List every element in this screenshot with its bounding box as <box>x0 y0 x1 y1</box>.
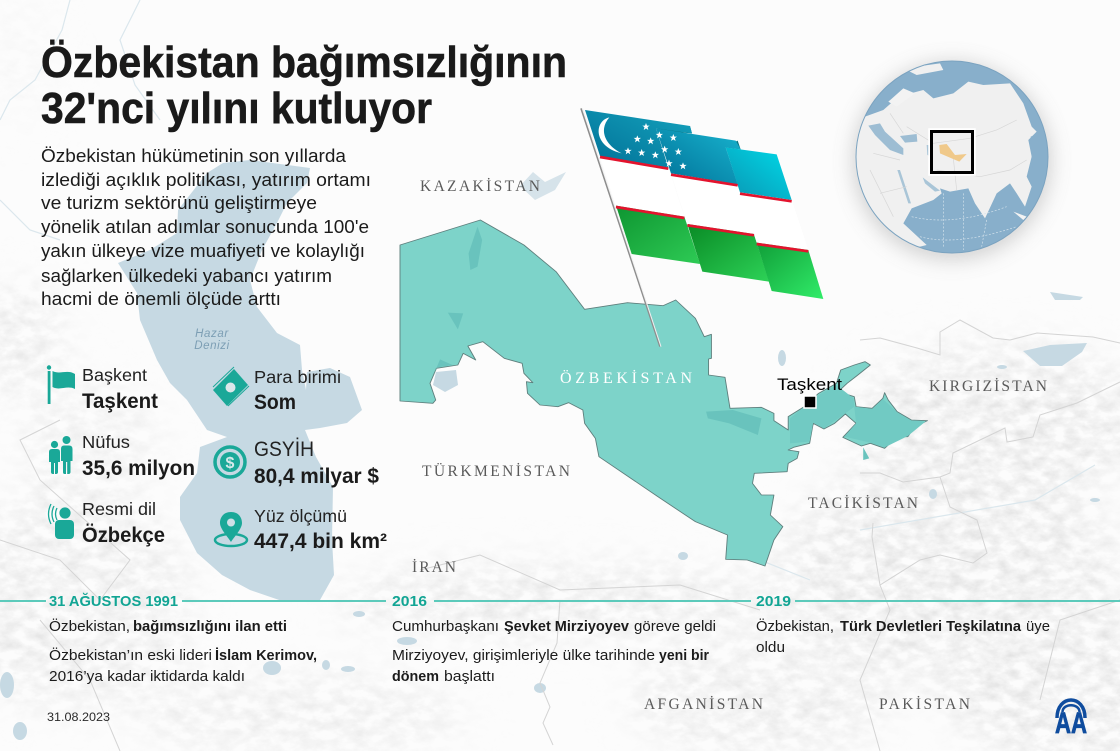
sea label: Hazar Denizi: Denizi <box>194 340 230 352</box>
fact: official language <box>48 499 165 547</box>
timeline entry: 1991 <box>49 592 317 685</box>
darker lakes and eastern valley <box>434 227 869 460</box>
fact: currency <box>213 367 341 414</box>
fact: capital <box>47 365 158 413</box>
icon: speaking person <box>48 504 74 539</box>
intro paragraph: yakın ülkeye vize muafiyeti ve kolaylığı <box>41 240 365 261</box>
fact: official language: Resmi dil <box>82 499 156 519</box>
fact: area: Yüz ölçümü <box>254 506 347 526</box>
intro paragraph: Özbekistan hükümetinin son yıllarda <box>41 145 347 166</box>
fact: GDP <box>215 438 379 488</box>
fact: GDP: GSYİH <box>254 438 314 461</box>
timeline entry: 1991: 2016’ya kadar iktidarda kaldı <box>49 669 245 685</box>
timeline entry: 2016: Cumhurbaşkanı <box>392 619 499 635</box>
intro paragraph: izlediği açıklık politikası, yatırım ortamı <box>41 169 371 190</box>
country label: Özbekistan: ÖZBEKİSTAN <box>560 369 692 387</box>
timeline entry: 2016: Şevket Mirziyoyev <box>504 619 629 635</box>
timeline entry: 2019: oldu <box>756 640 785 656</box>
icon: dollar coin: $ <box>226 455 235 472</box>
timeline <box>0 592 1120 685</box>
country label: Kırgızistan: KIRGIZİSTAN <box>929 378 1047 395</box>
Caspian Sea <box>118 160 362 602</box>
timeline entry: 2019: üye <box>1026 619 1050 635</box>
fact: area: 447,4 bin km² <box>254 530 387 553</box>
timeline entry: 2016: 2016 <box>392 593 427 610</box>
timeline entry: 2016: göreve geldi <box>634 619 716 635</box>
timeline entry: 2016: Mirziyoyev, girişimleriyle ülke tarihinde <box>392 648 655 664</box>
capital marker: Taşkent <box>777 375 842 408</box>
icon: banknote <box>213 367 249 406</box>
title <box>41 38 567 133</box>
icon: flag <box>47 365 75 404</box>
intro paragraph: yönelik atılan adımlar sonucunda 100'e <box>41 216 369 237</box>
flag pole <box>581 108 661 347</box>
timeline entry: 2019: Türk Devletleri Teşkilatına <box>840 619 1022 635</box>
fact: currency: Para birimi <box>254 367 341 387</box>
logo: Anadolu Agency: AA <box>1055 707 1087 740</box>
timeline entry: 1991: İslam Kerimov, <box>215 647 317 664</box>
fact: area <box>215 506 387 553</box>
icon: dollar coin <box>215 447 245 477</box>
timeline entry: 1991: 31 AĞUSTOS 1991 <box>49 592 178 610</box>
icon: location pin <box>215 512 247 546</box>
map of Uzbekistan <box>400 220 927 566</box>
timeline entry: 1991: Özbekistan, <box>49 617 130 635</box>
fact: capital: Taşkent <box>82 390 158 413</box>
fact: capital: Başkent <box>82 365 147 385</box>
timeline entry: 2016 <box>392 593 716 685</box>
timeline line <box>0 600 1120 602</box>
sea label: Hazar Denizi: Hazar <box>195 328 229 340</box>
flag of Uzbekistan <box>581 108 823 347</box>
logo: Anadolu Agency <box>1055 700 1087 740</box>
title: 32'nci yılını kutluyor <box>41 84 432 133</box>
country label: Afganistan: AFGANİSTAN <box>644 696 763 713</box>
intro paragraph: hacmi de önemli ölçüde arttı <box>41 288 281 309</box>
locator globe <box>840 61 1050 259</box>
timeline entry: 1991: bağımsızlığını ilan etti <box>133 619 287 635</box>
fact: population <box>49 432 195 480</box>
timeline entry: 2016: dönem <box>392 669 439 685</box>
country label: Pakistan: PAKİSTAN <box>879 696 970 713</box>
timeline entry: 2019: 2019 <box>756 593 791 610</box>
icon: people <box>49 436 72 474</box>
country label: Kazakistan: KAZAKİSTAN <box>420 178 540 195</box>
timeline entry: 2016: başlattı <box>444 669 495 685</box>
fact: official language: Özbekçe <box>82 524 165 547</box>
country label: İran: İRAN <box>412 559 456 576</box>
timeline entry: 1991: Özbekistan’ın eski lideri <box>49 646 212 664</box>
capital marker: Taşkent: Taşkent <box>777 375 842 394</box>
fact: population: Nüfus <box>82 432 130 452</box>
fact: currency: Som <box>254 391 296 414</box>
fact: GDP: 80,4 milyar $ <box>254 465 379 488</box>
intro paragraph <box>41 145 371 309</box>
country label: Türkmenistan: TÜRKMENİSTAN <box>422 463 570 480</box>
lakes and rivers <box>0 172 1100 740</box>
intro paragraph: sağlarken ülkedeki yabancı yatırım <box>41 265 332 286</box>
date: 31.08.2023 <box>47 710 110 724</box>
fact: population: 35,6 milyon <box>82 457 195 480</box>
timeline entry: 2016: yeni bir <box>659 648 709 664</box>
title: Özbekistan bağımsızlığının <box>41 38 567 87</box>
timeline entry: 2019: Özbekistan, <box>756 617 834 635</box>
locator box <box>930 130 974 174</box>
country label: Tacikistan: TACİKİSTAN <box>808 495 918 512</box>
intro paragraph: ve turizm sektörünü geliştirmeye <box>41 192 317 213</box>
timeline entry: 2019 <box>756 593 1050 656</box>
